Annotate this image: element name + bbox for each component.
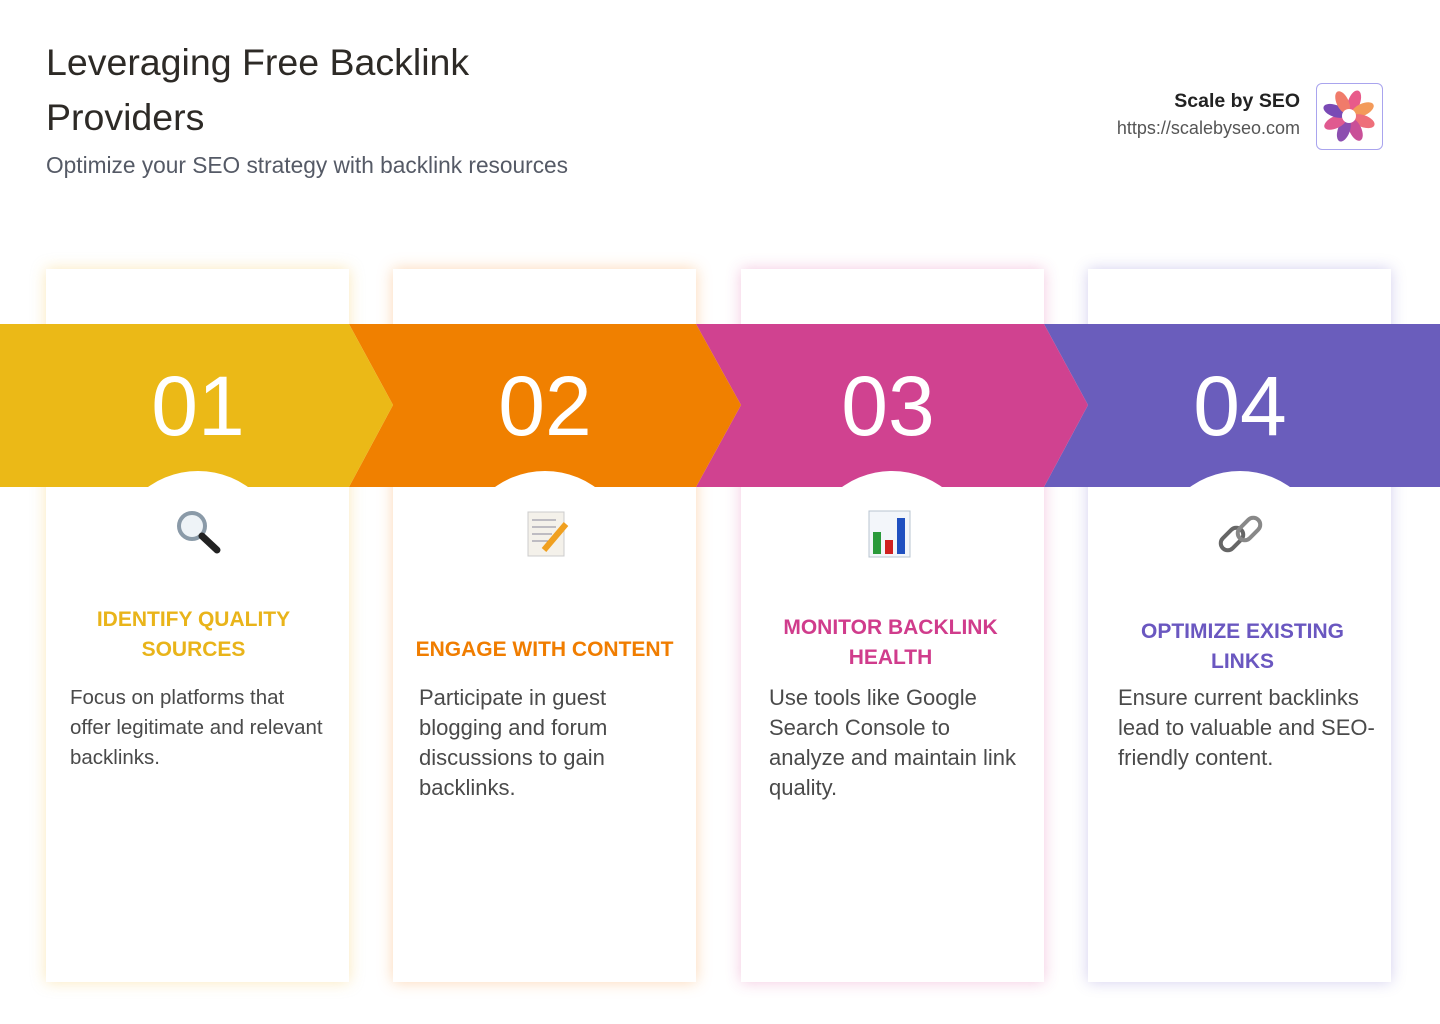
icon: link — [1218, 516, 1262, 552]
brand — [1117, 90, 1300, 138]
card 1 — [46, 269, 349, 982]
card 1 title: SOURCES — [142, 638, 245, 661]
title: Leveraging Free Backlink Providers — [46, 41, 469, 138]
arrow band: 04 — [1193, 359, 1287, 453]
card 3 title: HEALTH — [849, 646, 932, 669]
arrow band: 01 — [151, 359, 245, 453]
card 4 title — [1141, 620, 1344, 673]
subtitle: Optimize your SEO strategy with backlink resources — [46, 152, 568, 178]
card 1 text: Focus on platforms that offer legitimate and relevant backlinks. — [70, 686, 323, 769]
arrow band: 03 — [841, 359, 935, 453]
card 1 title — [97, 608, 290, 661]
brand: https://scalebyseo.com — [1117, 118, 1300, 138]
arrow band: 02 — [498, 359, 592, 453]
card 3 text: Use tools like Google Search Console to analyze and maintain link quality. — [769, 685, 1016, 800]
card 2 text: Participate in guest blogging and forum discussions to gain backlinks. — [419, 685, 607, 800]
card 4 text: Ensure current backlinks lead to valuable and SEO-friendly content. — [1118, 685, 1375, 770]
icon: bar chart — [868, 510, 910, 558]
card 2 — [393, 269, 696, 982]
card 3 title: MONITOR BACKLINK — [783, 616, 998, 639]
icon: magnifier — [177, 511, 220, 554]
card 4 — [1088, 269, 1391, 982]
card 4 title: LINKS — [1211, 650, 1274, 673]
icon: memo — [528, 512, 568, 556]
logo — [1316, 83, 1383, 150]
card 4 title: OPTIMIZE EXISTING — [1141, 620, 1344, 643]
card 3 title — [783, 616, 998, 669]
arrow band — [0, 324, 1440, 487]
card 1 title: IDENTIFY QUALITY — [97, 608, 290, 631]
card 3 — [741, 269, 1044, 982]
brand: Scale by SEO — [1174, 90, 1300, 112]
card 2 title: ENGAGE WITH CONTENT — [416, 638, 673, 661]
